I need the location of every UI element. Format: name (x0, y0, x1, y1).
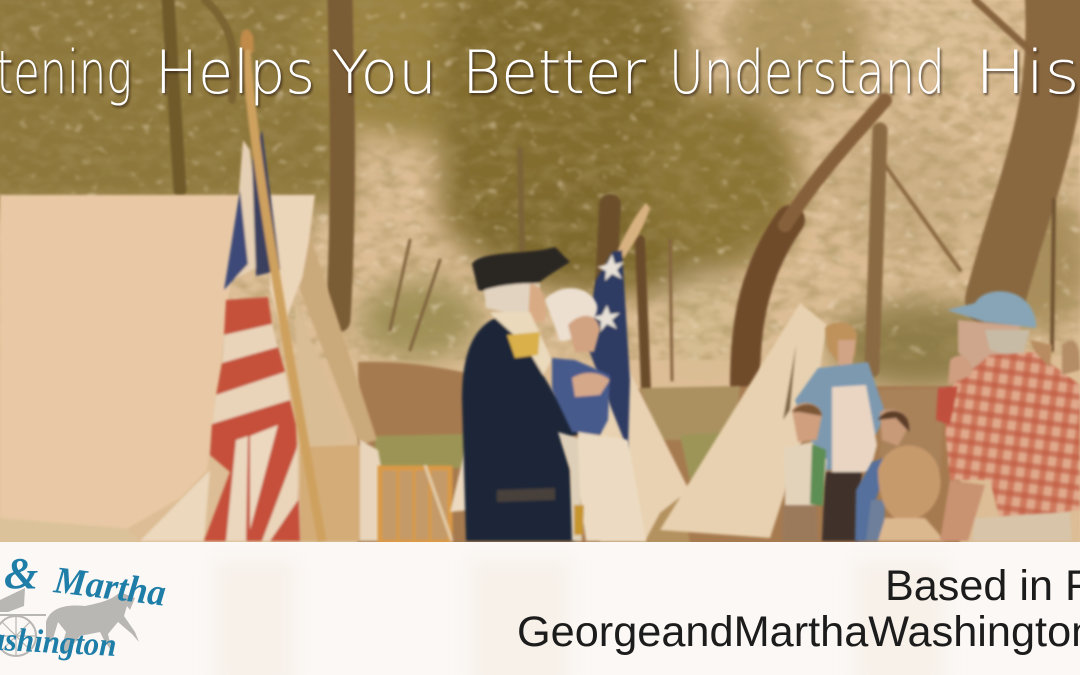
title band text: Helps (155, 38, 315, 108)
logo text: & (4, 549, 38, 598)
title band text (0, 38, 1080, 108)
ground: mulch bank and grass (358, 362, 960, 545)
tree trunks and branches (168, 0, 1056, 390)
logo: George & Martha Washington carriage (0, 549, 168, 664)
footer text: location and website (517, 562, 1080, 656)
faint photo showing through the footer (215, 560, 945, 675)
blue flag with white stars (585, 203, 650, 450)
icon: horse and carriage silhouette (0, 588, 139, 656)
small white tents in background (450, 303, 827, 541)
big canvas tent (0, 195, 395, 541)
children beside the woman (782, 403, 945, 541)
George Washington figure in navy coat (462, 247, 606, 541)
man in plaid shirt and blue cap (936, 291, 1080, 541)
title band text: You (331, 38, 437, 108)
logo text: Martha (51, 559, 168, 615)
American flag and pole (204, 32, 322, 541)
title band text: Better (462, 38, 646, 108)
title band text: Understand (669, 38, 945, 108)
folding wooden chair (380, 465, 452, 542)
woman in denim jacket (795, 322, 886, 541)
logo text (0, 549, 168, 664)
translucent footer band (0, 542, 1080, 675)
Martha Washington figure in white bonnet (545, 288, 646, 541)
